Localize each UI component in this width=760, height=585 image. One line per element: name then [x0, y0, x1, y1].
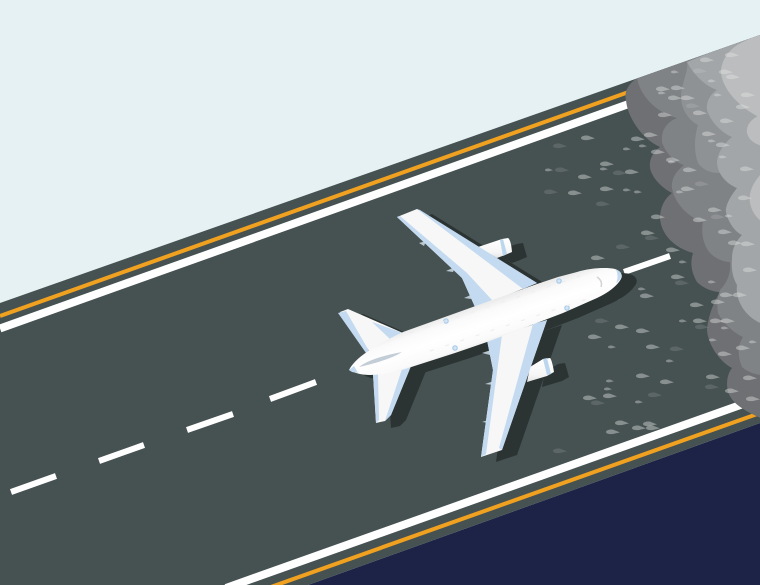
top edge orange line — [0, 88, 640, 316]
bottom edge white line — [226, 398, 760, 585]
airplane shadow — [355, 214, 637, 462]
lower engine — [527, 358, 554, 382]
small droplets — [545, 70, 757, 403]
navy ground corner — [308, 423, 760, 585]
lower tailplane — [373, 366, 411, 423]
bottom edge orange line — [268, 413, 760, 585]
rain droplets — [544, 52, 760, 453]
airplane — [338, 209, 622, 457]
smoke layer 1 — [625, 30, 760, 420]
runway centre dashes — [11, 256, 670, 492]
dorsal fin strip — [359, 352, 402, 367]
bright droplets — [568, 52, 760, 434]
doors — [444, 279, 569, 350]
smoke layer 3 — [681, 62, 732, 173]
fuselage — [349, 268, 622, 375]
smoke layer 5 — [721, 30, 760, 224]
flap fairings — [419, 241, 494, 423]
nose cone — [616, 270, 621, 283]
tail cone — [349, 366, 358, 373]
top edge white line — [0, 100, 640, 328]
lower wing — [481, 320, 547, 457]
upper tailplane — [338, 309, 403, 353]
smoke cloud — [625, 30, 760, 420]
smoke layer 4 — [687, 30, 760, 325]
faint droplets — [544, 68, 725, 453]
upper engine — [478, 238, 512, 258]
cockpit windscreen — [597, 277, 602, 287]
cabin windows — [410, 276, 590, 351]
upper wing — [397, 209, 537, 307]
smoke layer 2 — [637, 30, 760, 375]
